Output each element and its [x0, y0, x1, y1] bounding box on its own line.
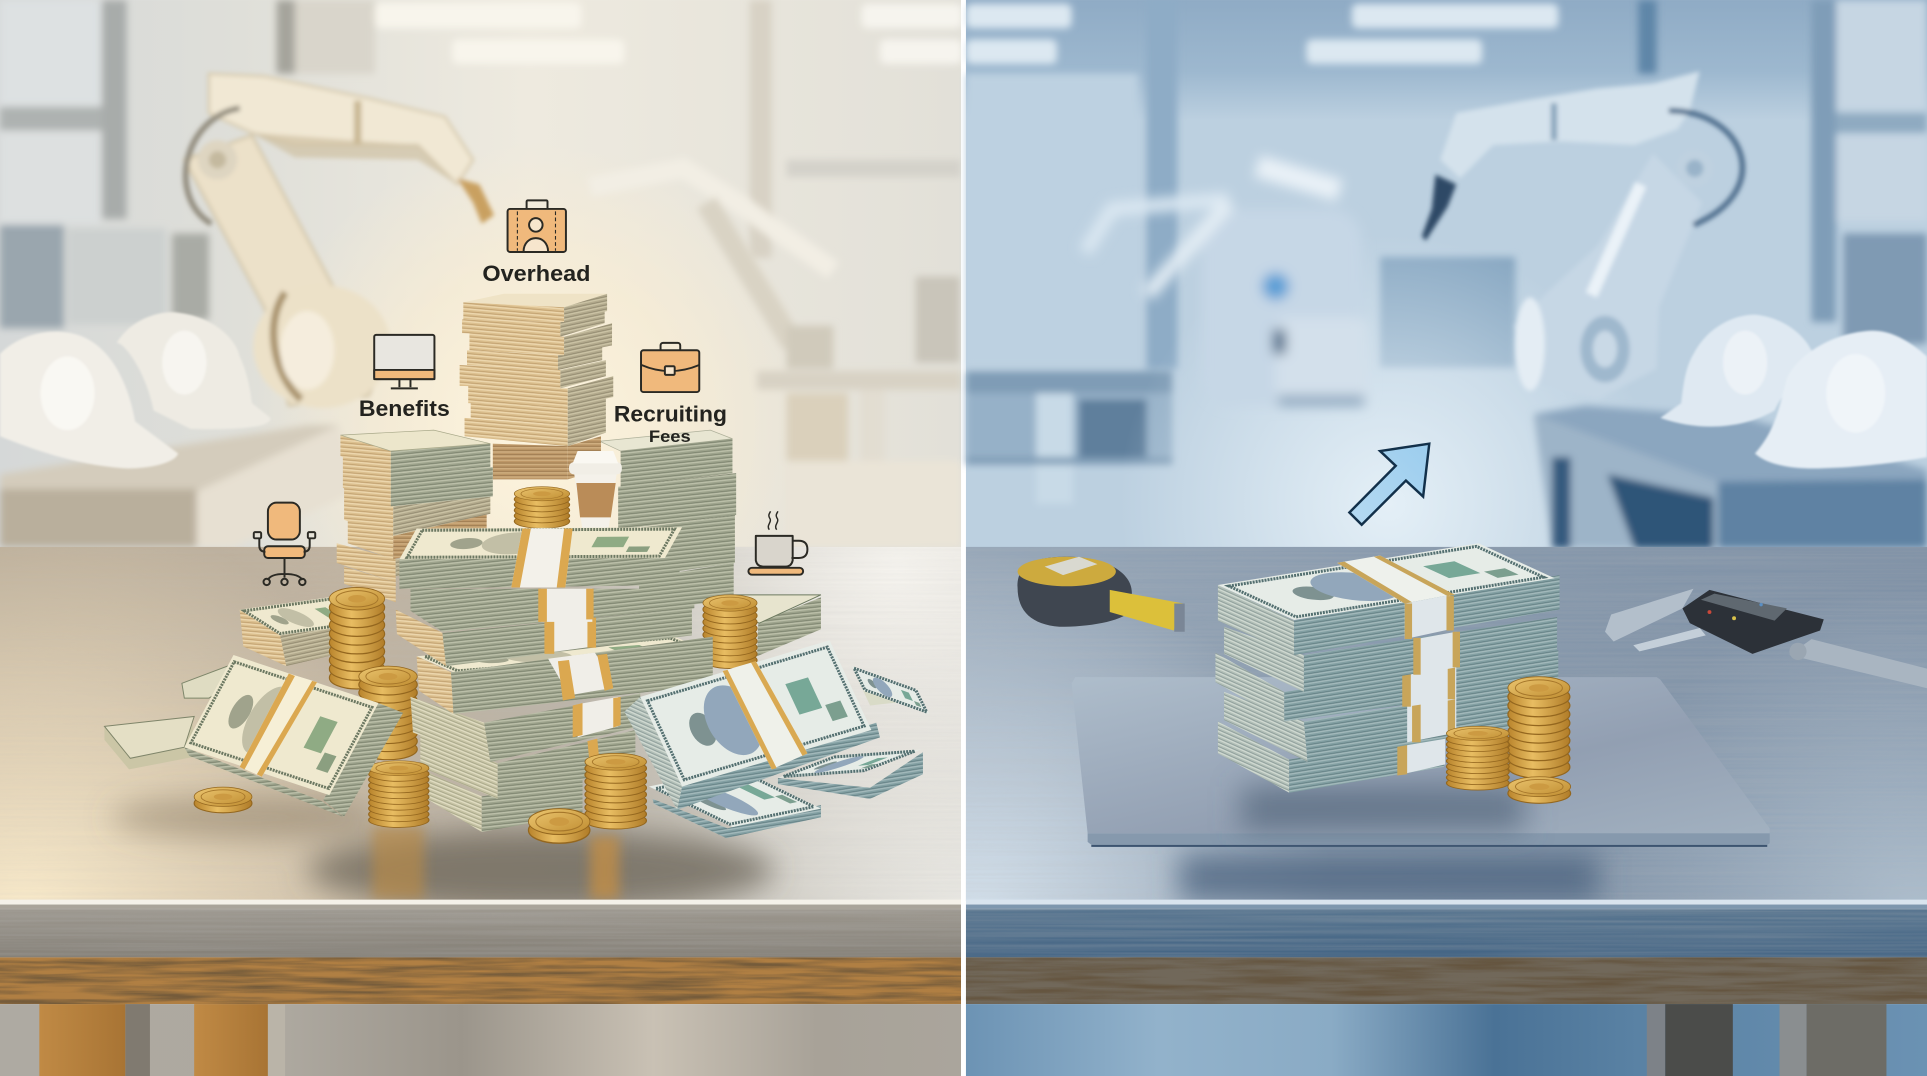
table top, right: [966, 547, 1927, 901]
label: recruiting fees: [614, 343, 727, 446]
panel: right, lean cool scene: [966, 0, 1927, 1076]
label: overhead: [482, 200, 591, 286]
divider between panels: [961, 0, 966, 1076]
coin stacks, right: [1446, 677, 1571, 803]
lean money stack: [1215, 543, 1560, 793]
icon: office chair: [254, 503, 315, 585]
bundle 3: [1215, 650, 1558, 721]
loose bills behind: [104, 595, 929, 769]
coin stack behind cup: [514, 487, 570, 528]
cost icons and labels: [254, 200, 807, 585]
robot arm, left: [184, 74, 494, 408]
stack: tall tan: [460, 294, 613, 479]
bundle G: [429, 773, 583, 832]
icon: briefcase: [641, 343, 699, 392]
text: Fees: Fees: [649, 427, 691, 446]
hard hats, left: [0, 312, 270, 468]
bundle 2: [1224, 617, 1557, 692]
flat bills lower right: [649, 750, 923, 838]
label: benefits: [359, 335, 450, 421]
takeaway coffee cup: [569, 451, 622, 530]
table edge and apron, right: [966, 900, 1927, 1004]
blurred cool factory background: [966, 0, 1927, 548]
bundle B: [410, 589, 694, 632]
bundle 1 with band: [1218, 543, 1560, 655]
bundle D: [417, 637, 713, 714]
measuring plate: [1072, 677, 1770, 847]
icon: steaming cup: [748, 511, 807, 575]
coin stacks front: [194, 753, 646, 843]
bundle 5: [1218, 721, 1445, 793]
icon: id badge case: [508, 200, 566, 252]
panel: left, costly warm scene: [0, 0, 962, 1076]
coin stack front left: [369, 761, 429, 827]
bundle F: [420, 730, 635, 799]
arrow pointing up right: [1349, 444, 1429, 525]
hard hats, right: [1660, 315, 1927, 469]
tilted bundle, left: [184, 655, 403, 817]
bundle C: [396, 608, 692, 666]
text: Benefits: Benefits: [359, 396, 450, 421]
banded bundle stack, centre: [396, 527, 713, 832]
text: Overhead: Overhead: [482, 261, 591, 286]
blurred warm factory background: [0, 0, 962, 548]
stack: left tan and green: [337, 430, 493, 602]
stack: grey green right: [600, 430, 736, 611]
coin stacks back: [329, 587, 757, 760]
icon: desktop monitor: [374, 335, 434, 388]
text: Recruiting: Recruiting: [614, 402, 727, 427]
table top, left: [0, 547, 961, 909]
bundle 4: [1224, 688, 1512, 762]
under-table area and legs, left: [0, 1004, 961, 1076]
robot arm, right: [1422, 71, 1742, 399]
tilted bundle, right: [624, 640, 880, 810]
icon: digital caliper: [1605, 589, 1927, 688]
icon: tape measure: [1018, 557, 1185, 632]
bundle E: [410, 693, 640, 762]
money pile, left: [104, 294, 929, 843]
under-table area and legs, right: [966, 1004, 1927, 1076]
bundle A with paper band: [399, 527, 682, 589]
table edge and wood apron, left: [0, 900, 961, 1004]
